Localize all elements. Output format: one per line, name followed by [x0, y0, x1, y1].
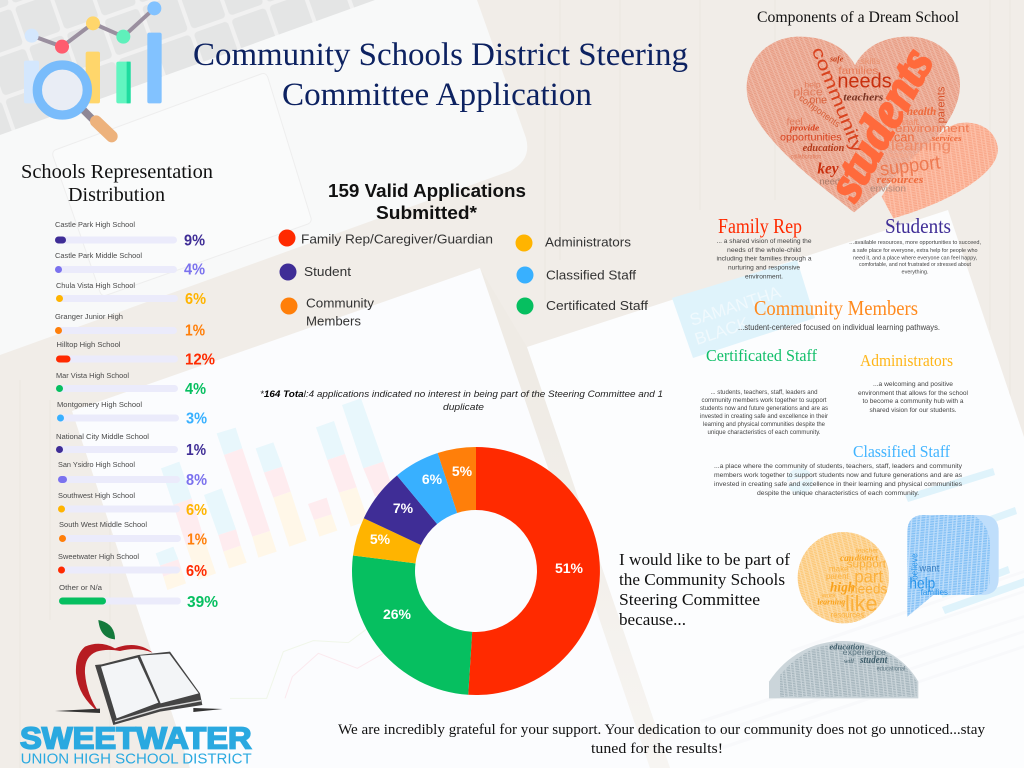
block: certificated staff: ... students, teachers, staff, leaders and: [710, 390, 818, 396]
word cloud: two hearts: needs: [837, 69, 892, 92]
text: I would like to be part of: Steering Committee: [619, 590, 760, 609]
word cloud: blue speech bubble: families: [921, 588, 948, 597]
word cloud: two hearts: students: [815, 38, 944, 209]
block: administrators: [858, 351, 969, 414]
block: family rep: ... a shared vision of meeting the: [716, 238, 812, 245]
row: Castle Park Middle School: Castle Park Middle School: [55, 253, 142, 260]
word cloud: two hearts: opportunities: [780, 132, 842, 143]
row: Chula Vista High School: Chula Vista High School: [56, 283, 135, 290]
block: family rep: nurturing and responsive: [728, 264, 800, 272]
word cloud: orange circle: work: [821, 593, 836, 600]
block: certificated staff: invested in creating safe and excellence in their: [700, 414, 828, 420]
word cloud: two hearts: feel: [787, 117, 803, 128]
word cloud: orange circle: teacher: [856, 547, 879, 554]
word cloud: two hearts: support: [879, 152, 942, 181]
word cloud: two hearts: teachers: [843, 93, 883, 104]
word cloud: blue speech bubble: want: [918, 564, 940, 575]
word cloud: blue speech bubble: [907, 515, 999, 617]
word cloud: gray semicircle: education: [829, 642, 865, 652]
word cloud: two hearts: services: [930, 134, 962, 143]
footnote: *164 Tota l:4 applications indicated no interest in being part of the Steering Committee and 1: [260, 389, 663, 399]
row: National City Middle School: 1%: [186, 442, 206, 459]
block: administrators: to become a community hub with a: [862, 398, 964, 405]
legend: Community: [306, 296, 375, 310]
legend: Administrators: [545, 236, 631, 250]
word cloud: two hearts: provide: [789, 123, 819, 133]
donut chart: 7%: [393, 500, 414, 516]
background: wood desk, laptop and papers: BLACK: [692, 313, 752, 349]
word cloud: two hearts: environment: [895, 123, 969, 135]
title: Committee Application: [282, 77, 592, 113]
word cloud: two hearts: parents: [935, 87, 947, 123]
footer thank-you message: We are incredibly grateful for your support. Your dedication to our community does not go unnoticed...stay: [338, 722, 985, 738]
word cloud: two hearts: need: [819, 176, 840, 186]
row: San Ysidro High School: San Ysidro High School: [58, 462, 135, 469]
background: wood desk, laptop and papers: SAMANTHA: [687, 282, 784, 330]
word cloud: two hearts: families: [838, 66, 878, 77]
text: I would like to be part of: the Community Schools: [619, 570, 785, 589]
donut chart: 26%: [383, 606, 412, 622]
block: classified staff: invested in creating safe and excellence in their learning and physical communities: [714, 481, 963, 488]
title: [193, 37, 688, 113]
block: classified staff: despite the unique characteristics of each community.: [757, 490, 919, 497]
row: Other or N/a: Other or N/a: [59, 585, 102, 592]
block: classified staff: ...a place where the community of students, teachers, staff, leaders and community: [714, 463, 963, 470]
word cloud: orange circle: parent: [826, 572, 849, 581]
row: Montgomery High School: Montgomery High School: [57, 402, 142, 409]
row: Southwest High School: Southwest High School: [58, 493, 135, 500]
heading: 159 valid applications: Submitted*: [376, 203, 477, 223]
block: certificated staff: unique characteristics of each community.: [708, 430, 821, 436]
row: Granger Junior High: [55, 314, 205, 340]
footnote: [260, 389, 663, 412]
word cloud: two hearts: key: [817, 160, 839, 177]
word cloud: two hearts: education: [803, 143, 845, 154]
heading: 159 valid applications: 159 Valid Applications: [328, 181, 526, 201]
block: students: Students: [885, 214, 951, 238]
word cloud: orange circle: support: [847, 559, 886, 571]
block: administrators: shared vision for our students.: [870, 407, 957, 414]
block: classified staff: [714, 442, 963, 497]
row: Castle Park High School: 9%: [184, 232, 205, 250]
block: family rep: [716, 214, 812, 280]
donut chart: 6%: [422, 471, 443, 487]
block: students: everything.: [902, 270, 929, 276]
block: family rep: needs of the whole-child: [727, 247, 801, 254]
legend: Student: [304, 265, 352, 279]
word cloud: orange circle: needs: [850, 580, 887, 596]
legend: Classified Staff: [546, 268, 637, 282]
footer thank-you message: tuned for the results!: [591, 741, 723, 757]
block: community members: Community Members: [754, 296, 918, 320]
word cloud: two hearts: envision: [870, 184, 906, 194]
word cloud: orange circle: [798, 532, 889, 623]
row: South West Middle School: 1%: [187, 532, 207, 548]
block: family rep: Family Rep: [718, 214, 802, 238]
word cloud: two hearts: learning: [891, 139, 951, 155]
row: Hilltop High School: Hilltop High School: [56, 342, 121, 349]
word cloud: two hearts: community: [808, 44, 868, 155]
row: Castle Park Middle School: 4%: [184, 262, 205, 278]
row: National City Middle School: [56, 434, 206, 459]
word cloud: two hearts: components: [797, 93, 842, 130]
word cloud: two hearts: one: [809, 94, 827, 106]
row: Mar Vista High School: [56, 373, 206, 398]
row: Sweetwater High School: [58, 554, 207, 580]
heading: schools representation distribution: Schools Representation: [21, 161, 213, 183]
word cloud: orange circle: learning: [817, 597, 845, 606]
block: family rep: environment.: [745, 274, 783, 280]
heading: schools representation distribution: [21, 161, 213, 206]
block: students: comfortable, and not frustrated or stressed about: [859, 262, 971, 268]
word cloud: gray semicircle: [769, 641, 918, 698]
row: Castle Park High School: Castle Park High School: [55, 222, 135, 229]
word cloud: two hearts: health: [907, 106, 936, 118]
legend: Certificated Staff: [546, 299, 649, 313]
block: students: …available resources, more opportunities to succeed,: [849, 240, 981, 246]
word cloud: orange circle: can: [840, 554, 854, 564]
word cloud: gray semicircle: experience: [843, 647, 886, 657]
word cloud: two hearts: academic: [887, 150, 919, 159]
block: certificated staff: students now and future generations and are as: [700, 406, 828, 412]
heading: 159 valid applications: [328, 181, 526, 223]
row: San Ysidro High School: [58, 462, 207, 489]
word cloud: orange circle: make: [829, 565, 849, 574]
logo: Sweetwater Union High School District: [20, 620, 252, 767]
word cloud: blue speech bubble: believe: [909, 553, 919, 580]
row: South West Middle School: [59, 522, 207, 548]
word cloud: gray semicircle: will: [844, 658, 854, 665]
block: certificated staff: Certificated Staff: [706, 346, 817, 365]
word cloud: two hearts: [747, 37, 998, 218]
row: Chula Vista High School: [56, 283, 206, 308]
word cloud: two hearts: help: [804, 79, 821, 89]
row: South West Middle School: South West Middle School: [59, 522, 147, 529]
block: certificated staff: learning and physical communities despite the: [703, 422, 826, 428]
word cloud: two hearts: place: [793, 87, 823, 99]
donut chart: 5%: [370, 531, 391, 547]
donut chart: [352, 447, 600, 695]
legend: Family Rep/Caregiver/Guardian: [301, 232, 493, 246]
word cloud: orange circle: like: [845, 591, 878, 616]
row: Granger Junior High: 1%: [185, 322, 205, 340]
heading: components of a dream school: Components of a Dream School: [757, 9, 959, 26]
word cloud: two hearts: staff: [902, 117, 918, 127]
block: administrators: ...a welcoming and positive: [873, 381, 953, 388]
row: Sweetwater High School: Sweetwater High School: [58, 554, 139, 561]
row: San Ysidro High School: 8%: [186, 472, 207, 489]
word cloud: orange circle: high: [830, 580, 855, 595]
logo: Sweetwater Union High School District: SWEETWATER: [20, 721, 252, 755]
footnote: duplicate: [443, 402, 484, 412]
row: Montgomery High School: [57, 402, 207, 428]
word cloud: orange circle: resources: [831, 611, 864, 620]
word cloud: two hearts: resources: [877, 175, 923, 186]
logo: Sweetwater Union High School District: UNION HIGH SCHOOL DISTRICT: [21, 750, 252, 767]
word cloud: orange circle: part: [854, 566, 883, 586]
row: Mar Vista High School: 4%: [185, 381, 206, 398]
block: students: a safe place for everyone, extra help for people who: [852, 248, 978, 254]
bar chart: schools representation: [55, 222, 218, 611]
text: I would like to be part of: [619, 550, 790, 629]
word cloud: two hearts: skills: [860, 56, 881, 66]
word cloud: gray semicircle: student: [859, 655, 888, 666]
block: classified staff: Classified Staff: [853, 442, 950, 461]
word cloud: gray semicircle: educational: [877, 665, 906, 672]
text: I would like to be part of: I would like to be part of: [619, 550, 790, 569]
heading: schools representation distribution: Distribution: [68, 184, 165, 206]
block: community members: [738, 296, 940, 332]
row: Castle Park Middle School: [55, 253, 205, 278]
block: students: need it, and a place where everyone can feel happy,: [853, 256, 977, 262]
donut chart: 5%: [452, 463, 473, 479]
row: Mar Vista High School: Mar Vista High School: [56, 373, 129, 380]
donut chart: 51%: [555, 560, 584, 576]
word cloud: orange circle: district: [855, 553, 878, 562]
row: Chula Vista High School: 6%: [185, 291, 206, 308]
footer thank-you message: [338, 722, 985, 757]
row: National City Middle School: National City Middle School: [56, 434, 149, 441]
block: administrators: environment that allows for the school: [858, 390, 969, 397]
legend: [278, 230, 649, 328]
row: Other or N/a: [59, 585, 218, 611]
row: Castle Park High School: [55, 222, 205, 250]
row: Sweetwater High School: 6%: [186, 563, 207, 580]
legend: Members: [306, 314, 361, 328]
word cloud: two hearts: safe: [829, 54, 844, 63]
block: certificated staff: [700, 346, 828, 436]
word cloud: two hearts: collaboration: [791, 154, 822, 161]
row: Southwest High School: [58, 493, 207, 519]
row: Hilltop High School: [56, 342, 215, 368]
word cloud: two hearts: can: [894, 130, 914, 144]
title: Community Schools District Steering: [193, 37, 688, 73]
block: certificated staff: community members work together to support: [702, 398, 827, 404]
row: Hilltop High School: 12%: [185, 352, 215, 368]
block: family rep: including their families through a: [716, 256, 812, 262]
block: students: [849, 214, 981, 276]
icon: chart with magnifying glass: [24, 1, 162, 136]
block: administrators: Administrators: [860, 351, 953, 370]
block: community members: ...student-centered focused on individual learning pathways.: [738, 323, 940, 332]
row: Granger Junior High: Granger Junior High: [55, 314, 123, 321]
word cloud: blue speech bubble: help: [909, 575, 935, 592]
block: classified staff: members work together to support students now and future generations and are as: [714, 472, 963, 479]
row: Southwest High School: 6%: [186, 502, 207, 519]
text: I would like to be part of: because...: [619, 610, 686, 629]
row: Montgomery High School: 3%: [186, 410, 207, 428]
row: Other or N/a: 39%: [187, 594, 218, 611]
